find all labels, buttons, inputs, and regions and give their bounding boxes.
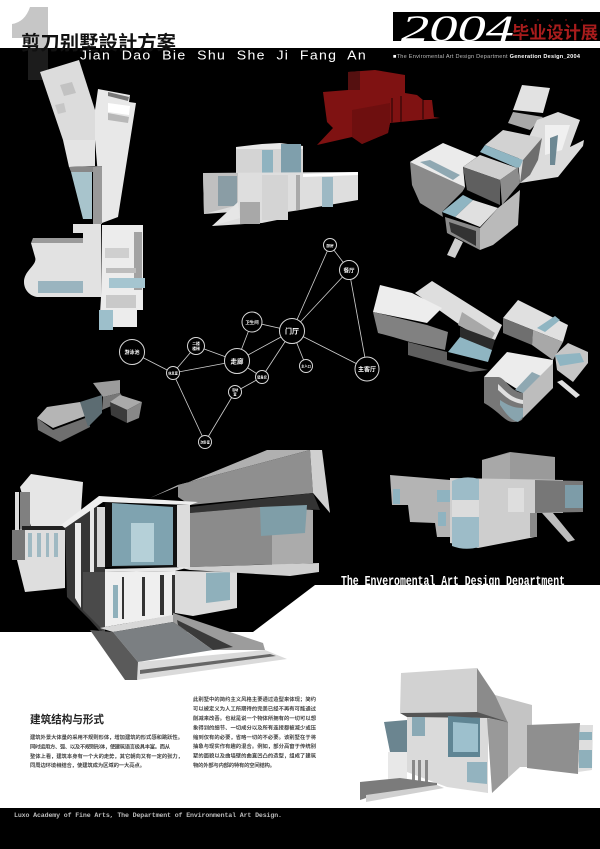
node: 活动室: 活动 <box>232 387 239 392</box>
main hero building rendering <box>12 450 330 680</box>
node: 休息室: 休息室 <box>168 370 179 376</box>
exhibition banner: 毕业设计展 <box>512 24 598 42</box>
footer band <box>0 808 600 849</box>
body text left column: 同周边环境相结合，使建筑成为区域的一大亮点。 <box>30 761 145 769</box>
body text left column <box>30 733 183 769</box>
node: 卫生间: 卫生间 <box>245 319 259 326</box>
building: bottom-right perspective <box>360 668 593 802</box>
node: 二楼楼梯 <box>188 338 204 354</box>
node: 厨房 <box>324 238 336 252</box>
footer text: Luxo Academy of Fine Arts, The Department of Environmental Art Design. <box>14 812 282 819</box>
body text right column: 物的外部与内部的特有的空间结构。 <box>193 761 275 769</box>
exhibition banner: 2004 <box>401 9 514 50</box>
node: 餐厅 <box>340 260 358 280</box>
building: top-right aerial view <box>410 85 584 258</box>
node: 主入口: 主入口 <box>301 364 311 368</box>
node: 活动室 <box>228 386 242 398</box>
node: 走廊 <box>224 348 250 374</box>
body text left column: 建筑外景大体量的采用不规则形体，增加建筑的形式感和跳跃性。 <box>30 733 183 741</box>
body text right column: 削减来改善。也就是说一个物体所拥有的一切可以想 <box>193 714 317 722</box>
body text right column: 抽象与现实作有趣的混合。例如，部分高窗于传统别 <box>193 742 316 750</box>
node: 二楼楼梯: 二楼 <box>192 341 200 346</box>
building: right aerial view <box>373 281 588 422</box>
node: 主客厅 <box>355 357 379 381</box>
node: 游泳池 <box>120 340 144 364</box>
building: top-left roof plan view <box>24 60 145 330</box>
node: 活动室: 室 <box>233 392 237 396</box>
node: 厨房: 厨房 <box>326 243 334 248</box>
subtitle pinyin: Jian Dao Bie Shu She Ji Fang An <box>80 48 367 62</box>
building: side elevation <box>203 143 358 226</box>
department tagline: ■The Enviromental Art Design Department Generation Design_2004 <box>393 54 581 60</box>
exhibition banner <box>393 9 600 50</box>
body text right column <box>193 695 317 769</box>
node: 二楼楼梯: 楼梯 <box>192 346 200 351</box>
node: 门厅 <box>280 318 304 344</box>
node: 游泳池: 游泳池 <box>124 349 140 356</box>
node: 卫生间 <box>242 312 262 332</box>
building: left small aerial view <box>37 380 142 442</box>
node: 健身房: 健身房 <box>257 374 267 380</box>
node: 主客厅: 主客厅 <box>358 366 376 374</box>
body text right column: 墅的面貌以及曲墙壁的曲直凹凸的造型，组成了建筑 <box>193 752 317 760</box>
body text right column: 缩到仅有的必要，省略一切的不必要。该别墅在于将 <box>193 733 317 741</box>
node: 餐厅: 餐厅 <box>343 266 355 274</box>
node: 主入口 <box>300 360 312 372</box>
building: red massing model <box>317 70 440 145</box>
title: 剪刀别墅設計方案 <box>21 32 176 54</box>
big numeral 1 <box>12 7 48 80</box>
node: 次卧室 <box>198 436 212 448</box>
body text right column: 象得到的细节、一切成分以及所有连接都被减少或压 <box>193 724 317 732</box>
body text right column: 可以被定义为人工所期待的完美已经不再有可能通过 <box>193 704 317 712</box>
node: 次卧室: 次卧室 <box>200 440 211 444</box>
body text left column: 同时运用方、弧、以及不规则形体，使建筑语言极具丰富。而从 <box>30 742 171 750</box>
node: 健身房 <box>256 370 268 384</box>
body text right column: 此别墅中的简约主义风格主要通过造型来体现；简约 <box>193 695 316 703</box>
bubble diagram <box>120 238 379 448</box>
body text left column: 整体上看，建筑本身有一个大的走势，其它朝向又有一定的张力， <box>30 752 183 760</box>
section heading: 建筑结构与形式 <box>30 713 104 726</box>
node: 休息室 <box>166 366 180 380</box>
building: lower-right elevation <box>390 452 583 549</box>
node: 门厅: 门厅 <box>285 326 299 336</box>
node: 走廊: 走廊 <box>230 356 244 366</box>
